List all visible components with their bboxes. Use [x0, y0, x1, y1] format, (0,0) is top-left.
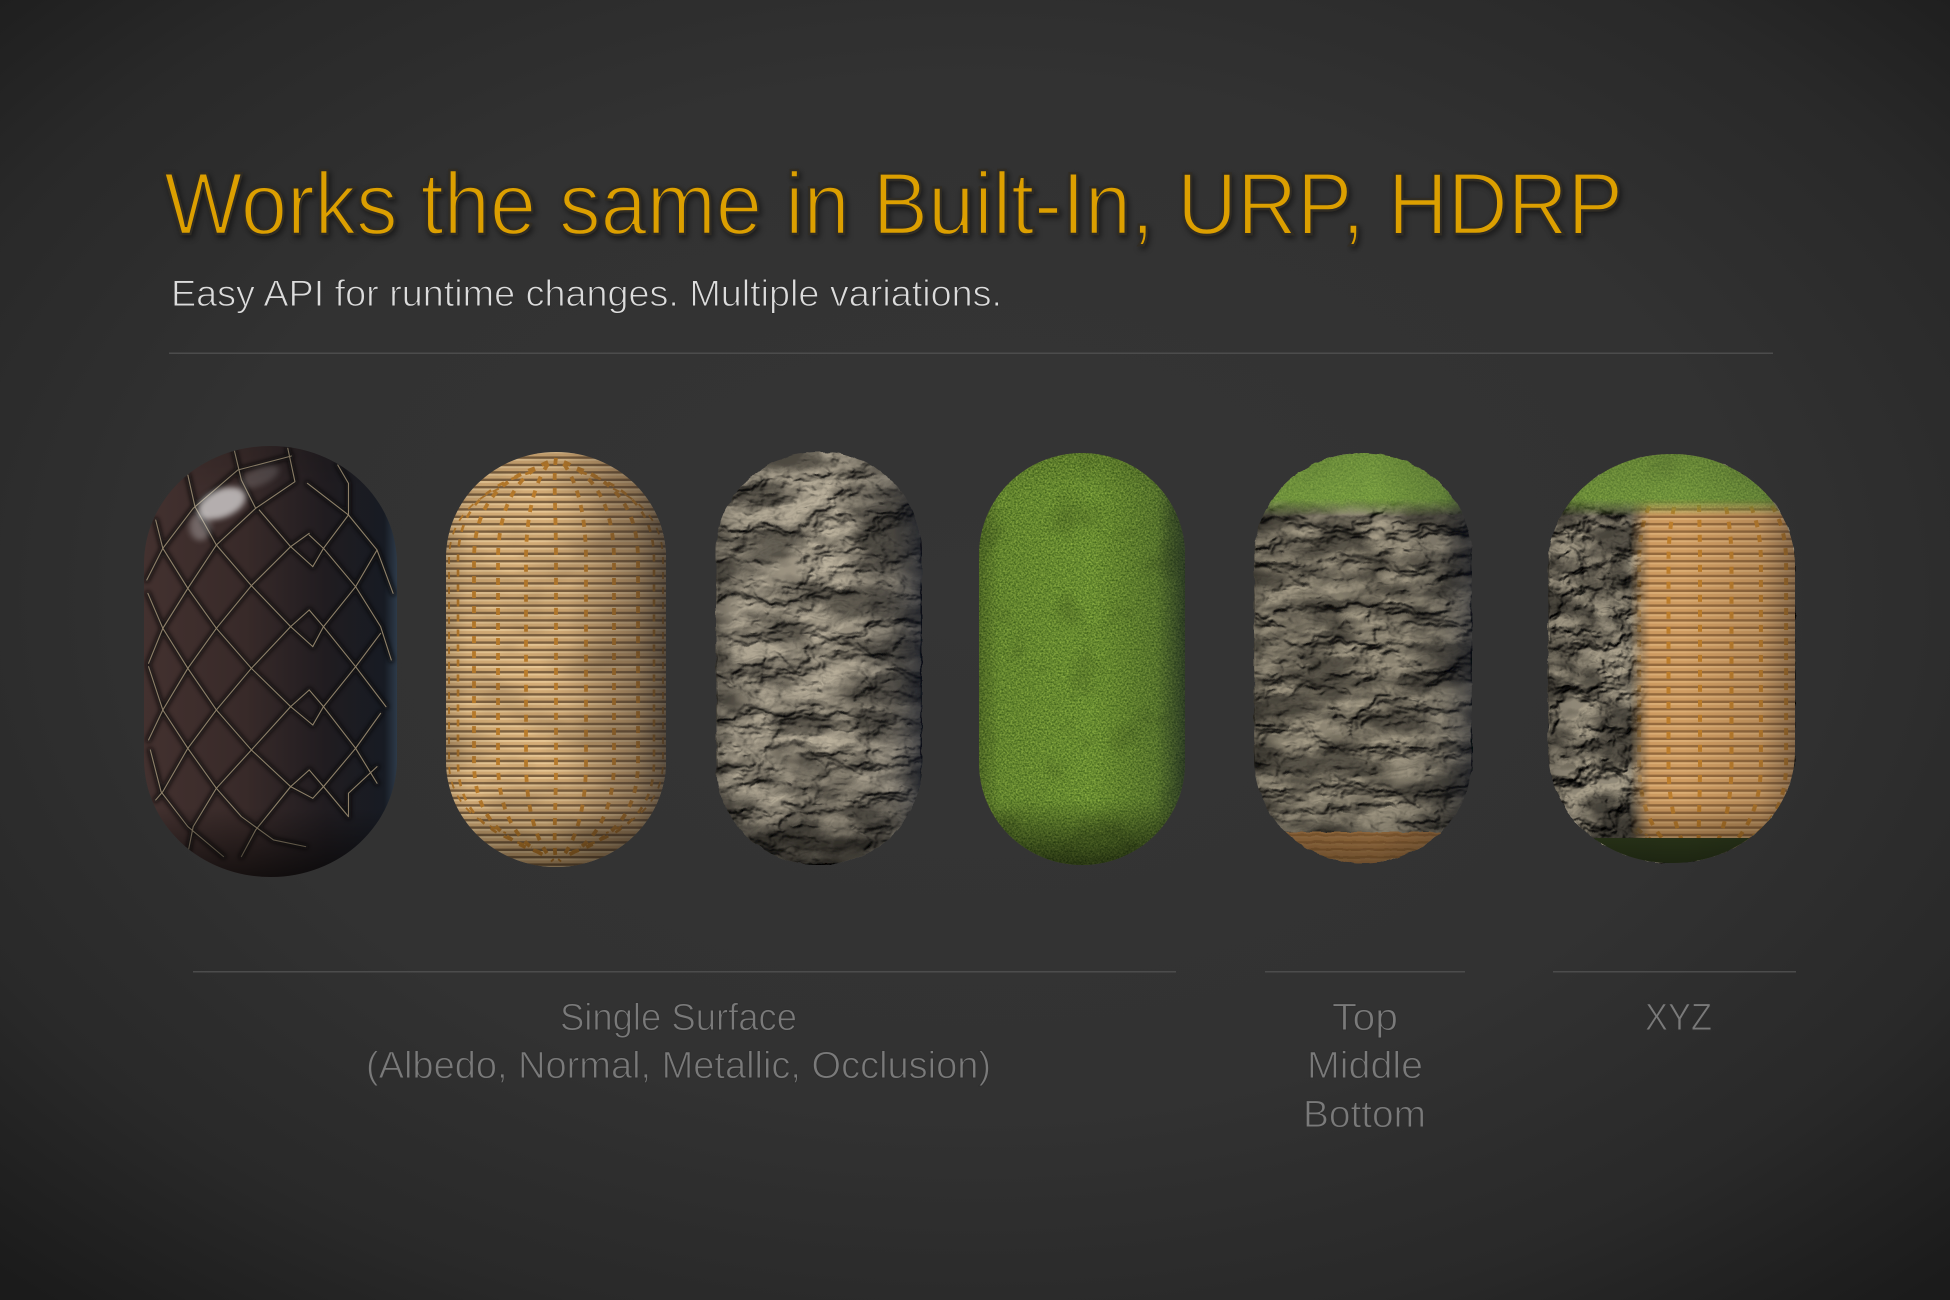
label: top middle bottom: Top — [1332, 997, 1398, 1039]
capsule: top middle bottom — [1254, 450, 1472, 863]
bottom dark grass — [1594, 838, 1750, 863]
wicker side — [1631, 491, 1795, 849]
label: top middle bottom: Bottom — [1303, 1094, 1426, 1136]
label: top middle bottom: Middle — [1307, 1045, 1423, 1087]
subtitle: Easy API for runtime changes. Multiple variations. — [171, 273, 1002, 314]
label: single surface — [366, 997, 991, 1087]
label: single surface: (Albedo, Normal, Metallic, Occlusion) — [366, 1045, 991, 1087]
label: top middle bottom — [1303, 997, 1426, 1136]
bottom wicker cap — [1286, 832, 1441, 864]
capsule: xyz — [1548, 450, 1812, 863]
top grass cap — [1264, 453, 1462, 516]
capsule: grass — [979, 453, 1185, 865]
capsule: rock — [716, 452, 922, 865]
label: single surface: Single Surface — [560, 997, 797, 1039]
title: Works the same in Built-In, URP, HDRP — [164, 154, 1623, 253]
label: xyz: XYZ — [1645, 997, 1712, 1039]
capsule: quilted leather — [144, 446, 397, 877]
capsule: wicker — [446, 452, 666, 867]
top grass cap — [1562, 454, 1780, 515]
